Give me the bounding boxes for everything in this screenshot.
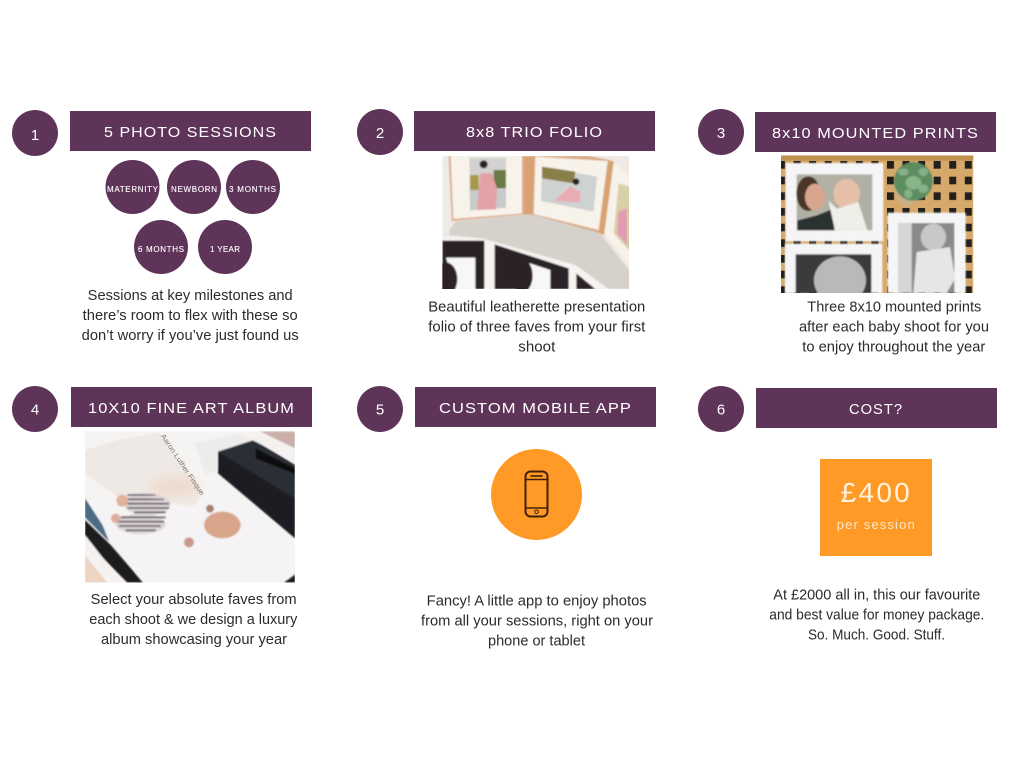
description: cost: and best value for money package. bbox=[769, 608, 984, 624]
description: prints: after each baby shoot for you bbox=[799, 320, 989, 336]
photo: folio on glass table bbox=[435, 156, 630, 296]
description: app bbox=[421, 594, 653, 650]
description: album bbox=[89, 592, 298, 648]
heading: cost bbox=[756, 388, 997, 428]
heading: 10x10 fine art album: 10X10 FINE ART ALBUM bbox=[88, 400, 295, 417]
number badge 1 bbox=[12, 110, 58, 156]
infographic canvas bbox=[12, 109, 997, 648]
price box: £400 bbox=[841, 477, 910, 508]
album cover title: Aaron Luther Fisque bbox=[159, 433, 205, 497]
description: folio: folio of three faves from your first bbox=[428, 320, 645, 336]
description: prints bbox=[799, 300, 989, 356]
number badge 3 bbox=[698, 109, 744, 155]
photo: mounted prints on wooden rack bbox=[781, 155, 973, 304]
price box: per session bbox=[837, 517, 915, 532]
session circle: maternity bbox=[106, 160, 160, 214]
panel: cost bbox=[698, 386, 997, 644]
description: prints: to enjoy throughout the year bbox=[802, 340, 985, 356]
panel: 8x8 trio folio bbox=[357, 109, 655, 356]
number badge 6 bbox=[698, 386, 744, 432]
panel: 5 photo sessions bbox=[12, 110, 311, 344]
description: sessions: don’t worry if you’ve just found us bbox=[82, 328, 299, 344]
panel: 10x10 fine art album bbox=[12, 386, 312, 648]
panel: 8x10 mounted prints bbox=[698, 109, 996, 356]
description: folio bbox=[428, 300, 645, 356]
session circle: newborn bbox=[167, 160, 221, 214]
number badge 2 bbox=[357, 109, 403, 155]
heading: custom mobile app bbox=[415, 387, 656, 427]
session circle: 3 months: 3 MONTHS bbox=[229, 185, 276, 194]
description: cost: So. Much. Good. Stuff. bbox=[808, 628, 945, 644]
description: sessions: Sessions at key milestones and bbox=[88, 288, 293, 304]
heading: 8x8 trio folio: 8x8 TRIO FOLIO bbox=[466, 124, 603, 141]
heading: 8x10 mounted prints bbox=[755, 112, 996, 152]
heading: 8x8 trio folio bbox=[414, 111, 655, 151]
photo: open fine art album bbox=[85, 431, 295, 583]
number badge 2: 2 bbox=[376, 125, 384, 142]
description: album: each shoot & we design a luxury bbox=[89, 612, 298, 628]
number badge 1: 1 bbox=[31, 127, 39, 144]
number badge 3: 3 bbox=[717, 125, 725, 142]
description: cost: At £2000 all in, this our favourite bbox=[773, 588, 980, 604]
number badge 4: 4 bbox=[31, 402, 39, 418]
heading: 8x10 mounted prints: 8x10 MOUNTED PRINTS bbox=[772, 125, 979, 142]
number badge 5: 5 bbox=[376, 402, 384, 418]
description: prints: Three 8x10 mounted prints bbox=[807, 300, 981, 316]
heading: 5 photo sessions: 5 PHOTO SESSIONS bbox=[104, 124, 277, 141]
session circle: maternity: MATERNITY bbox=[107, 185, 159, 194]
heading: 5 photo sessions bbox=[70, 111, 311, 151]
session circle: 1 year: 1 YEAR bbox=[210, 245, 240, 254]
number badge 6: 6 bbox=[717, 402, 725, 418]
session circle: 1 year bbox=[198, 220, 252, 274]
session circle: 6 months bbox=[134, 220, 188, 274]
description: cost bbox=[769, 588, 984, 644]
session circle: 6 months: 6 MONTHS bbox=[138, 245, 184, 254]
heading: cost: COST? bbox=[849, 401, 903, 418]
session circle: newborn: NEWBORN bbox=[171, 185, 217, 194]
number badge 5 bbox=[357, 386, 403, 432]
price box bbox=[820, 459, 932, 556]
number badge 4 bbox=[12, 386, 58, 432]
description: folio: Beautiful leatherette presentation bbox=[428, 300, 645, 316]
description: app: Fancy! A little app to enjoy photos bbox=[427, 594, 647, 610]
description: sessions: there’s room to flex with these so bbox=[83, 308, 298, 324]
heading: 10x10 fine art album bbox=[71, 387, 312, 427]
description: app: phone or tablet bbox=[488, 634, 585, 650]
description: app: from all your sessions, right on your bbox=[421, 614, 653, 630]
description: album: Select your absolute faves from bbox=[91, 592, 297, 608]
panel: custom mobile app bbox=[357, 386, 656, 650]
description: sessions bbox=[82, 288, 299, 344]
session circle: 3 months bbox=[226, 160, 280, 214]
description: album: album showcasing your year bbox=[101, 632, 287, 648]
description: folio: shoot bbox=[518, 340, 555, 356]
heading: custom mobile app: CUSTOM MOBILE APP bbox=[439, 400, 632, 417]
icon: mobile phone in orange circle bbox=[491, 449, 582, 540]
